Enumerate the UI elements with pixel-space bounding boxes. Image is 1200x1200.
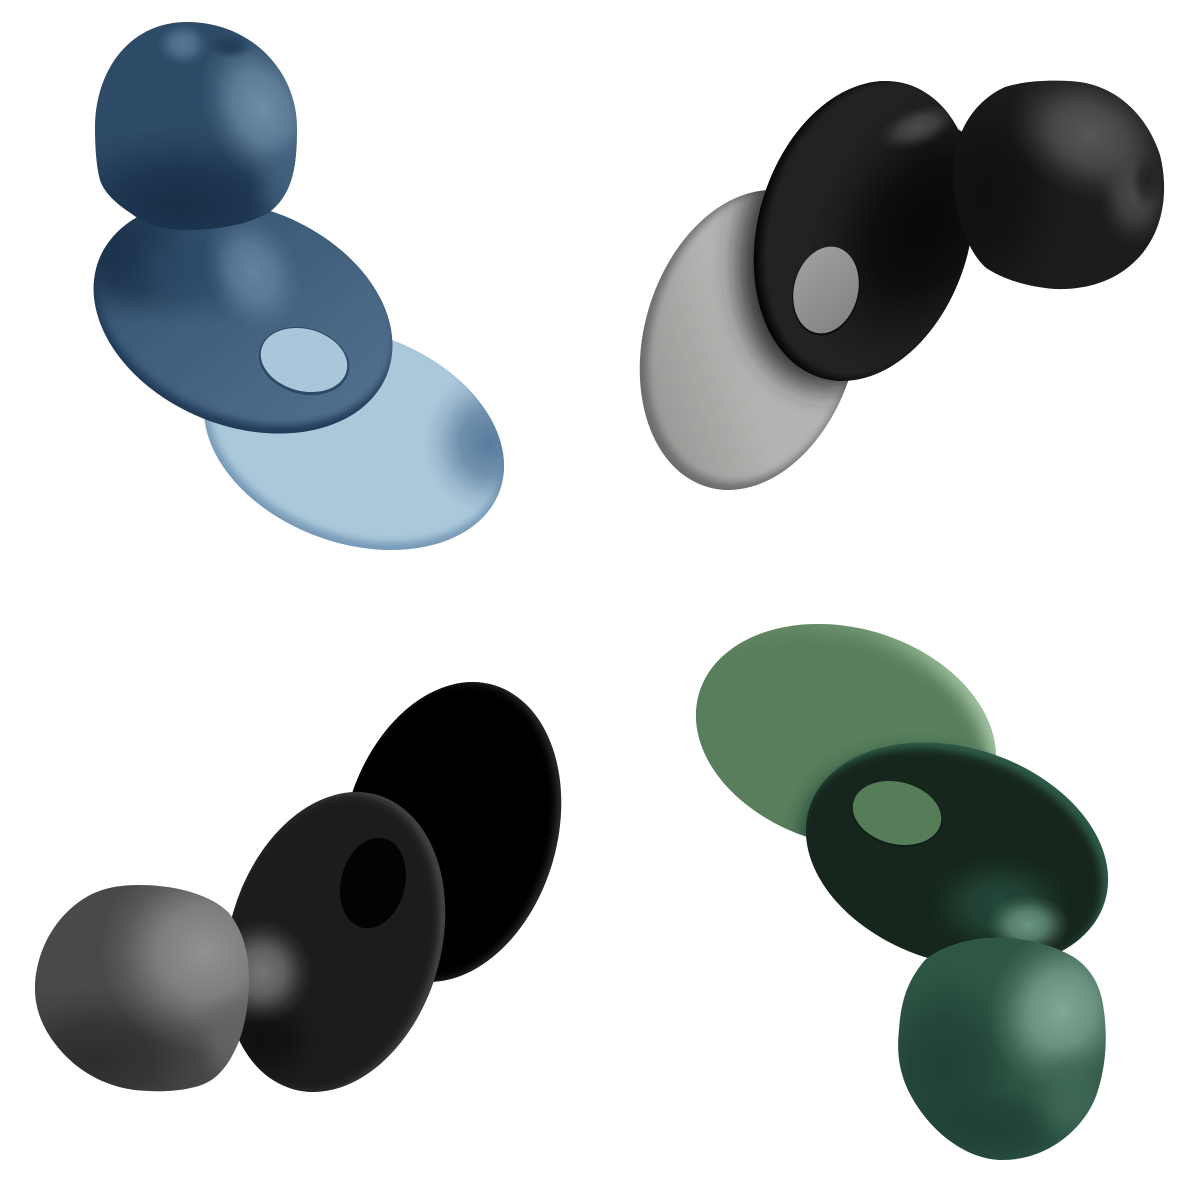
blue button — [251, 317, 357, 405]
black neck — [935, 115, 968, 285]
grey button — [783, 239, 869, 343]
charcoal hole — [331, 831, 415, 935]
green button — [845, 772, 949, 856]
blue front disc — [94, 211, 392, 434]
earplug: charcoal — [34, 682, 562, 1092]
grey bulb — [34, 885, 249, 1092]
grey back disc — [640, 190, 848, 490]
earplug: black and grey — [640, 80, 1164, 490]
green neck shading — [946, 867, 1067, 946]
dark green front disc — [806, 742, 1108, 958]
charcoal neck shading — [239, 925, 307, 1078]
black bulb — [962, 80, 1164, 290]
green bulb — [898, 938, 1106, 1160]
charcoal front disc — [232, 792, 446, 1092]
black front disc — [754, 81, 970, 381]
earplug: blue — [94, 22, 504, 550]
light green back disc — [696, 624, 996, 837]
blue neck shading — [94, 218, 290, 318]
earplug: green — [696, 624, 1108, 1160]
black back disc — [352, 682, 562, 982]
blue bulb — [95, 22, 297, 230]
light blue back disc — [204, 340, 504, 550]
